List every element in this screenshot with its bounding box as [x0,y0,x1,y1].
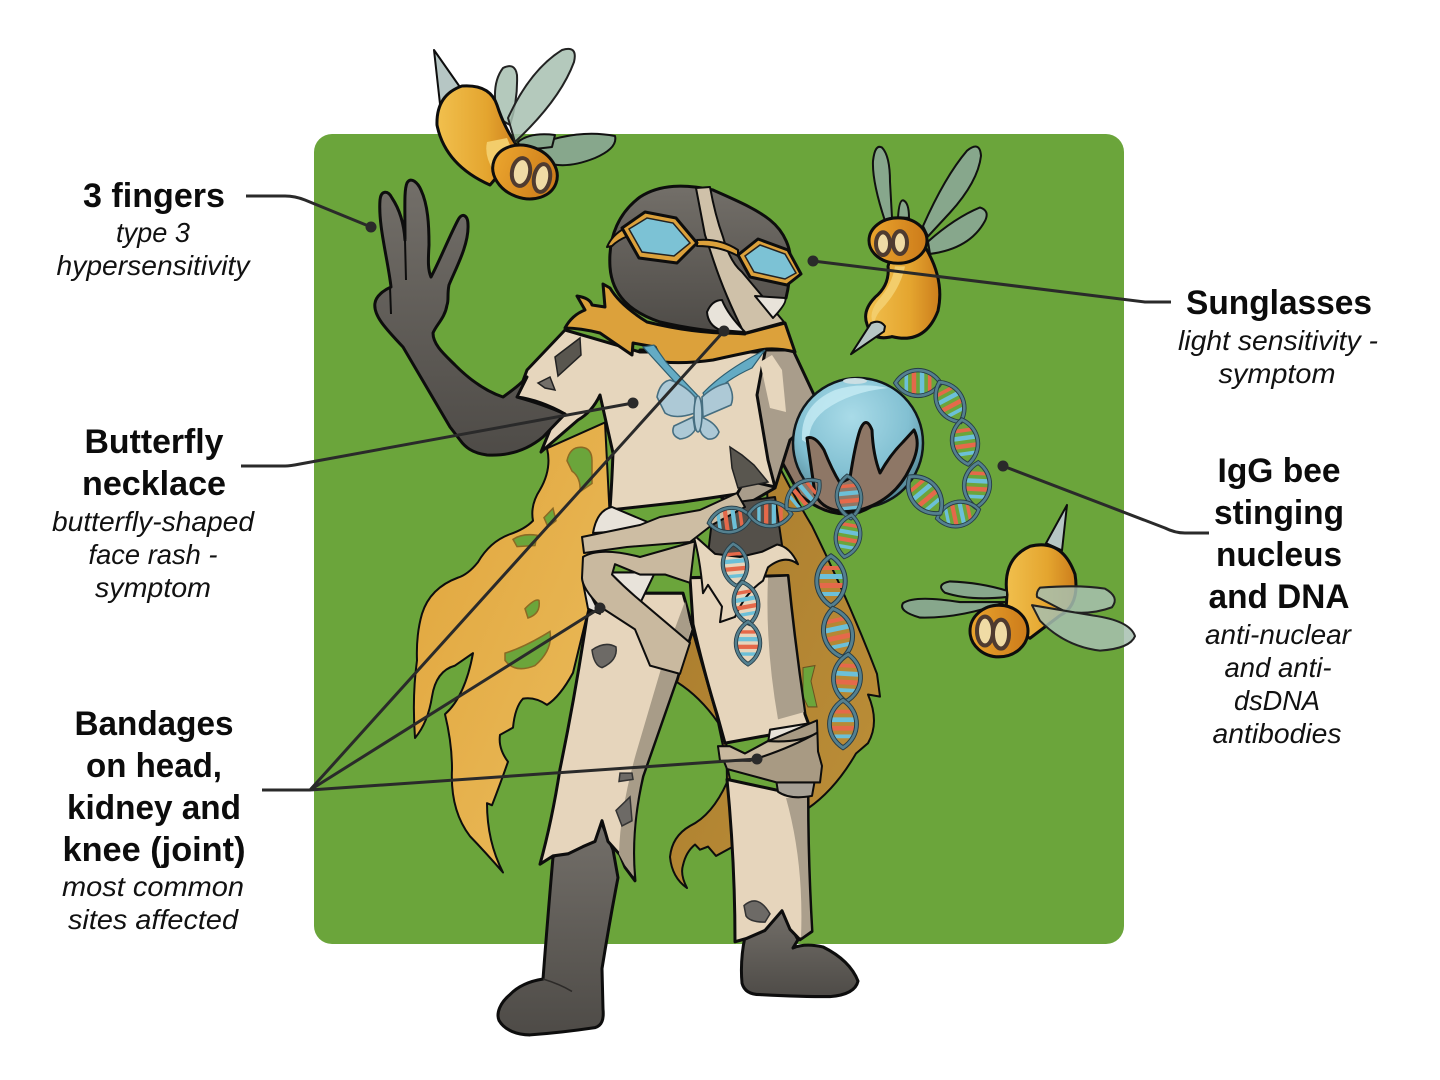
label: bandages: sites affected [68,904,239,935]
bee: top left [434,49,615,208]
knee bandage [718,720,822,797]
right trouser leg lower [727,779,812,942]
right goggle [738,239,801,285]
label: bandages: on head, [86,747,222,785]
trouser flap [693,534,798,622]
bee: top right [851,147,987,354]
label: IgG bee [1205,452,1353,749]
label: 3 fingers [56,177,252,281]
label: butterfly necklace: butterfly-shaped [52,506,255,537]
right boot [741,911,858,997]
scarf [565,284,795,363]
right trouser leg upper [690,576,810,743]
leader: bandages [262,326,762,790]
left boot [498,824,618,1035]
label: sunglasses: symptom [1218,358,1336,389]
label: IgG bee: dsDNA [1234,685,1320,716]
label: butterfly necklace: face rash - [88,539,218,570]
sphere fingers [807,422,917,511]
label: butterfly necklace: symptom [95,572,211,603]
label: sunglasses [1178,284,1378,389]
label: bandages: knee (joint) [62,831,246,869]
left arm and three-fingered hand [375,180,565,455]
torso shirt [517,330,822,510]
cape holes [505,447,592,669]
label: butterfly necklace: Butterfly [84,423,224,461]
waist bandages [582,493,745,674]
label: butterfly necklace: necklace [82,465,226,503]
trouser holes [592,644,633,826]
label: bandages: most common [62,871,244,902]
dark lower belly [705,497,782,580]
label: 3 fingers: 3 fingers [83,177,225,215]
left trouser leg [540,593,693,881]
label: IgG bee: and DNA [1208,578,1350,616]
goggle strap [607,228,628,247]
leader: 3 fingers [246,196,376,232]
label: IgG bee: stinging [1214,494,1344,532]
label: sunglasses: light sensitivity - [1178,325,1378,356]
DNA strands [707,370,991,748]
butterfly necklace [643,345,765,439]
leader: IgG bee [998,460,1209,533]
leader: butterfly necklace [241,398,638,466]
head [607,186,801,334]
label: 3 fingers: type 3 [116,217,190,248]
exposed face patches [707,300,745,332]
label: IgG bee: IgG bee [1218,452,1340,490]
label: bandages: kidney and [67,789,241,827]
label: bandages: Bandages [74,705,234,743]
label: IgG bee: nucleus [1216,536,1342,574]
right forearm and cupped hand [765,419,918,514]
label: IgG bee: antibodies [1212,718,1342,749]
sphere: cell nucleus [793,378,923,511]
label: IgG bee: and anti- [1224,652,1332,683]
label: bandages [62,705,246,935]
left goggle [622,212,697,263]
bee: lower right [902,505,1135,657]
label: 3 fingers: hypersensitivity [56,250,252,281]
label: butterfly necklace [52,423,255,603]
character [375,180,918,1035]
cape: right side [670,438,880,888]
label: IgG bee: anti-nuclear [1205,619,1353,650]
head bandage [696,187,784,333]
label: sunglasses: Sunglasses [1186,284,1372,322]
leader: sunglasses [808,256,1171,302]
cape: left side [414,422,610,872]
green background panel [314,134,1124,944]
